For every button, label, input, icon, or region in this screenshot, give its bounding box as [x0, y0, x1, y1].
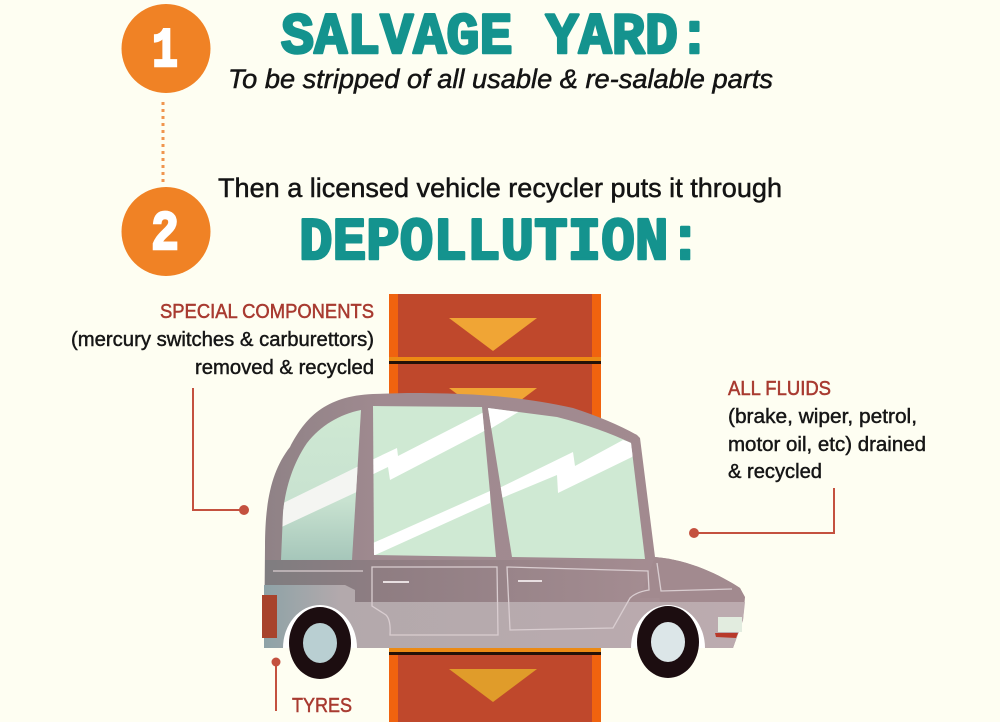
car body upper: [264, 393, 745, 648]
intro line for depollution: Then a licensed vehicle recycler puts it through: [218, 173, 782, 203]
callout: all fluids: (brake, wiper, petrol,: [728, 406, 917, 428]
subheading: salvage yard description: To be stripped of all usable & re-salable parts: [228, 64, 773, 94]
tail light: [262, 595, 277, 638]
step 2 number badge: [122, 187, 210, 276]
car hood: [640, 557, 745, 598]
callout: special components: removed & recycled: [195, 357, 374, 379]
label: tyres: TYRES: [292, 695, 352, 717]
callout: special components: [71, 301, 374, 379]
heading: depollution: DEPOLLUTION:: [299, 210, 702, 278]
callout: all fluids: ALL FLUIDS: [728, 378, 831, 400]
door handles: [383, 581, 542, 582]
leader line: tyres: [272, 658, 280, 711]
middle window: [373, 406, 496, 557]
rear wheel: [283, 605, 357, 679]
step 1 number badge: [122, 4, 210, 93]
road: [389, 294, 601, 722]
leader line: all fluids: [689, 488, 834, 538]
heading: salvage yard: SALVAGE YARD:: [281, 6, 711, 71]
callout: all fluids: motor oil, etc) drained: [728, 434, 926, 456]
car: [262, 393, 745, 679]
callout: special components: SPECIAL COMPONENTS: [160, 301, 374, 323]
dotted connector between steps: [162, 102, 164, 184]
leader line: special components: [193, 388, 249, 515]
front window: [488, 408, 645, 559]
callout: all fluids: [728, 378, 926, 483]
headlight: [718, 617, 742, 632]
rear side window: [281, 410, 361, 560]
car body lower: [264, 585, 745, 648]
car darker mid band: [265, 560, 660, 602]
callout: special components: (mercury switches & carburettors): [71, 329, 374, 351]
callout: all fluids: & recycled: [728, 461, 822, 483]
step 2 number badge: 2: [151, 202, 179, 266]
step 1 number badge: 1: [152, 19, 178, 83]
bumper light: [715, 633, 738, 638]
door outlines: [273, 563, 732, 635]
front wheel: [631, 605, 705, 678]
